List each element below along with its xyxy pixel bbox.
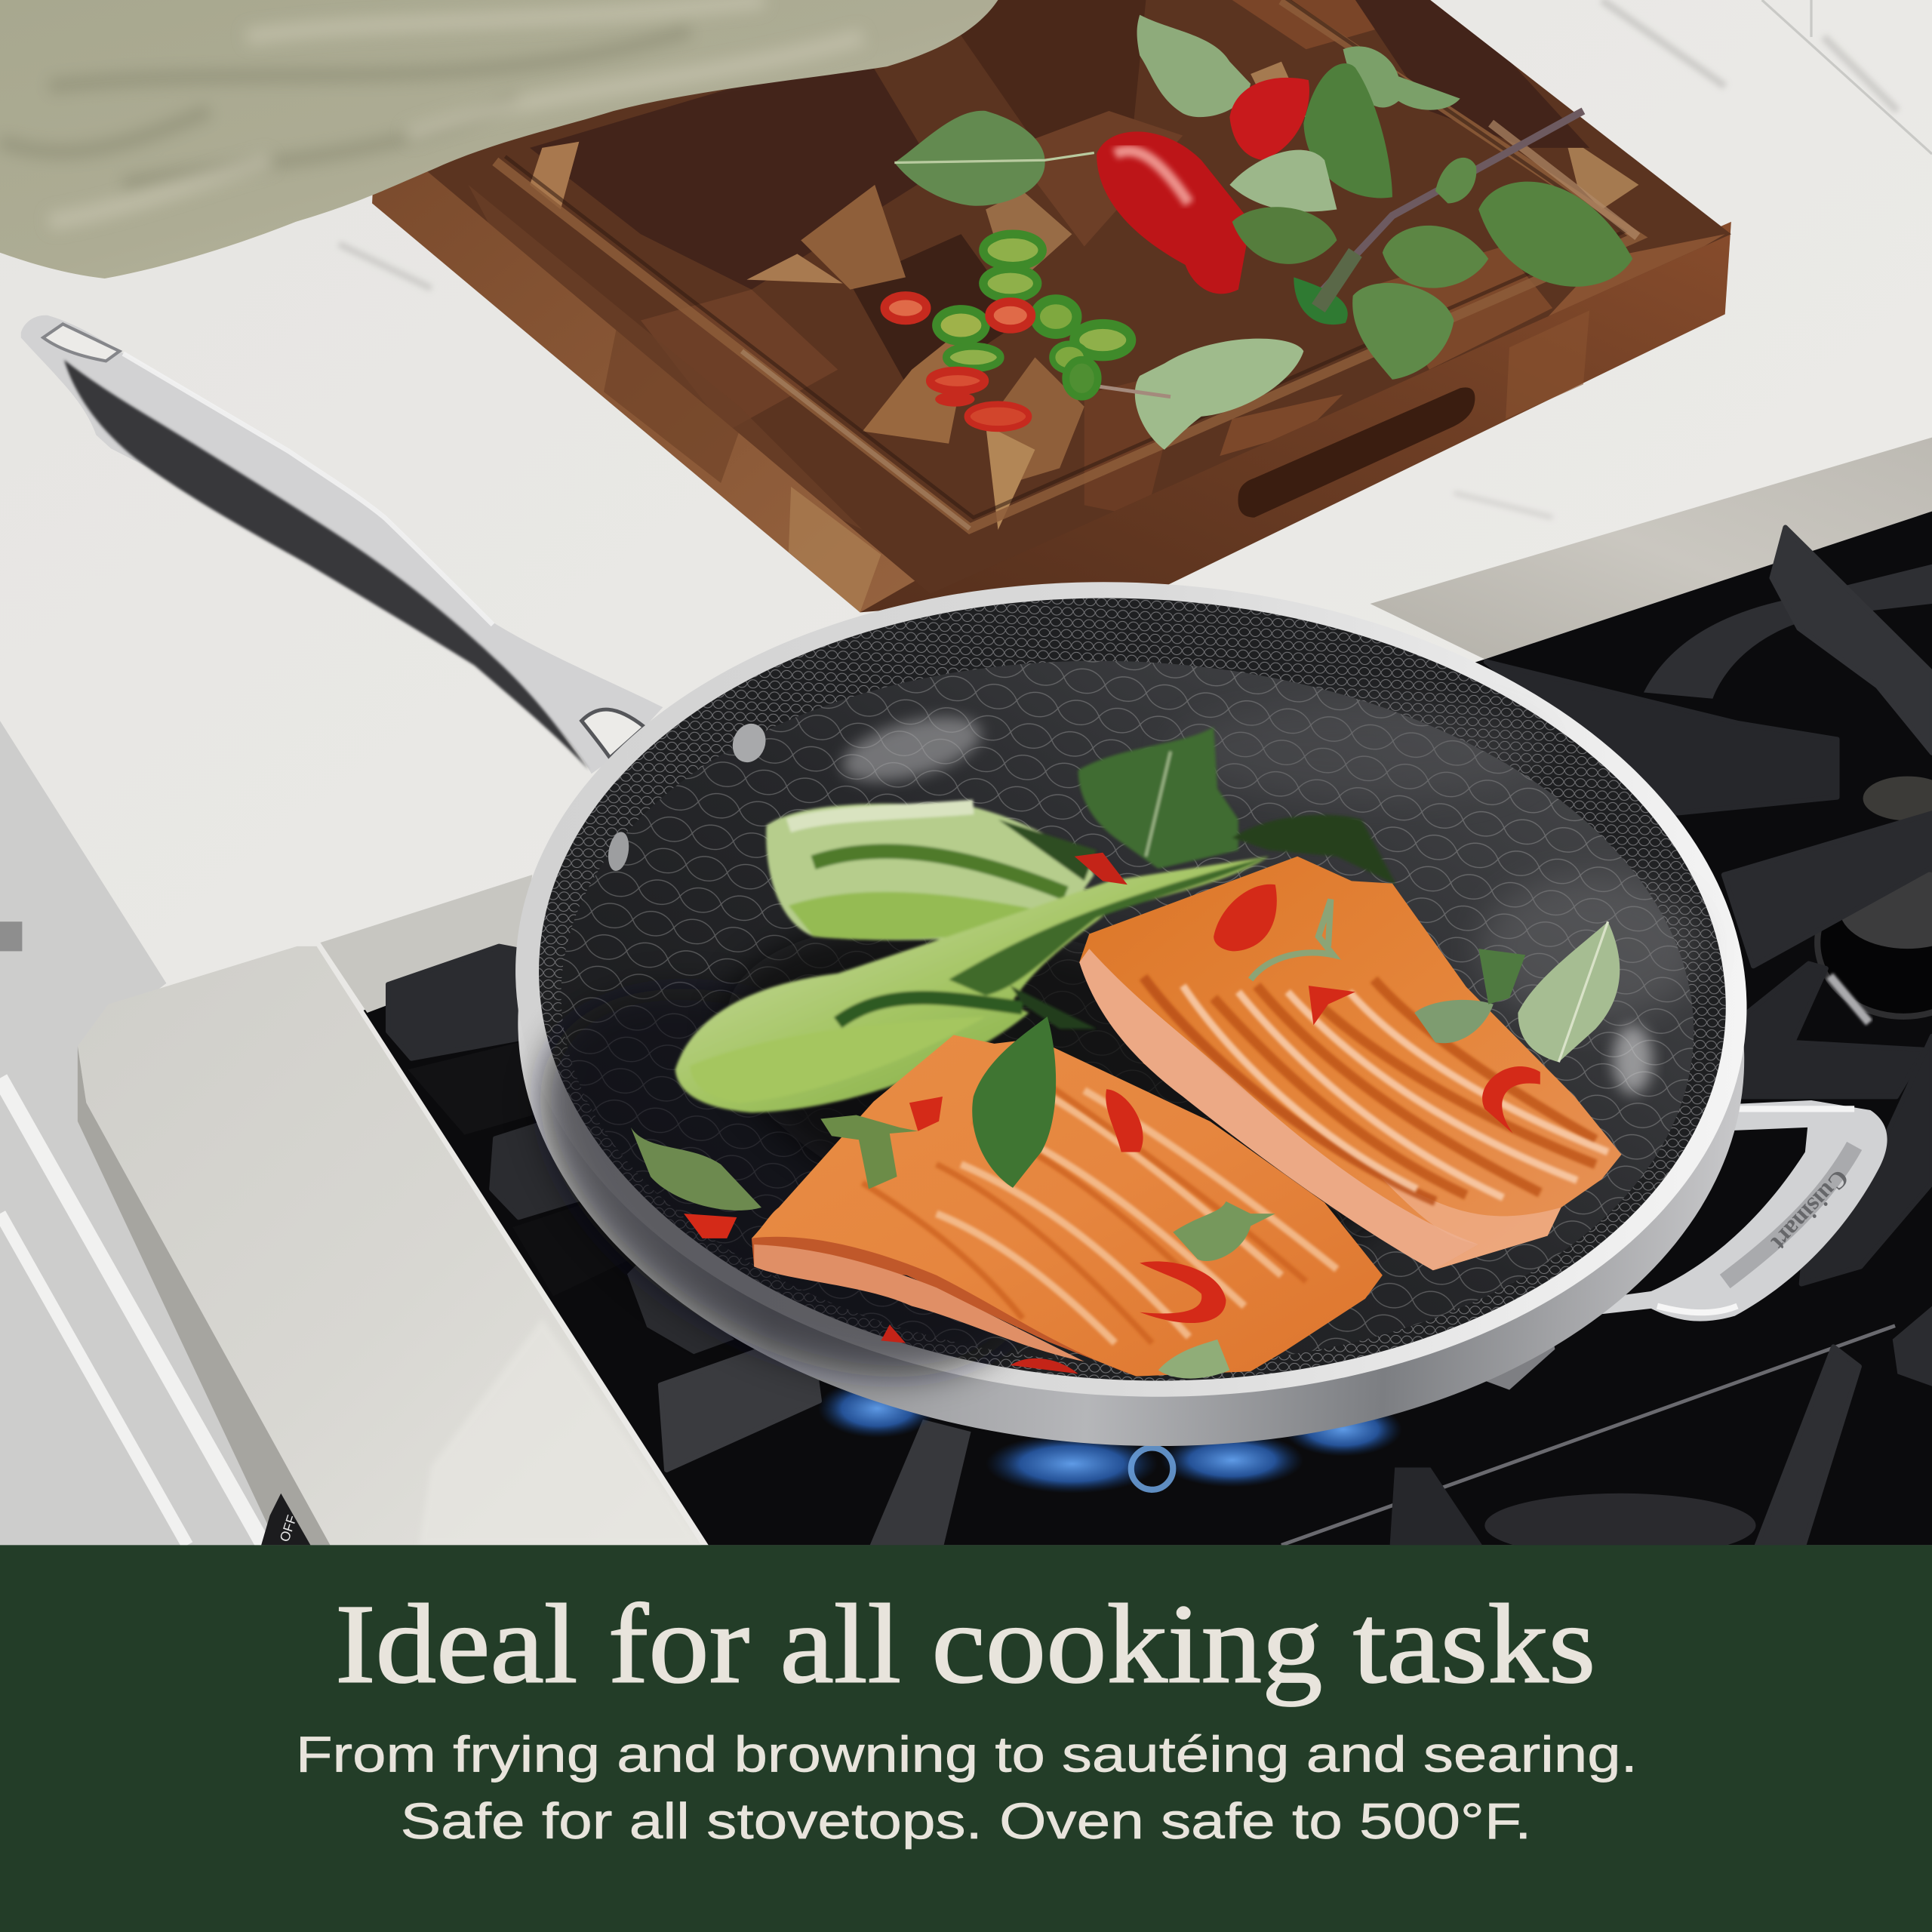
herb upper salmon: [1251, 900, 1334, 980]
rivets: [728, 719, 771, 767]
caption banner: [0, 1545, 1932, 1932]
basil sprig: [1229, 63, 1632, 380]
dark reflection: [64, 360, 589, 770]
sliced chilies: [884, 234, 1131, 429]
board top surface: [376, 0, 1731, 594]
chilies: [1214, 884, 1277, 951]
basil on lower salmon: [972, 1017, 1056, 1188]
juice groove: [495, 0, 1638, 528]
pan helper handle: [1476, 1100, 1887, 1390]
tile wall corner: [1762, 0, 1932, 154]
back bulb: [766, 804, 1094, 940]
cabinet front: [0, 721, 277, 1545]
highlights: [835, 704, 988, 794]
burner flames: [818, 1379, 1402, 1494]
hanging hole: [43, 324, 119, 361]
countertop: [0, 0, 1932, 1545]
knob dial: [261, 1494, 310, 1545]
salmon fillet lower: [752, 1035, 1383, 1377]
herb bottom: [1158, 1340, 1229, 1379]
knob label: OFF: [277, 1513, 300, 1543]
front bulb with stem: [675, 857, 1269, 1112]
board left side: [372, 128, 934, 612]
subtext line 1: From frying and browning to sautéing and searing.: [296, 1727, 1638, 1783]
herbs right: [1414, 1000, 1494, 1043]
rivet bracket: [1476, 1309, 1555, 1390]
pan cooking surface: [543, 632, 1712, 1393]
burner right: [1817, 777, 1932, 1023]
stove control panel: [78, 946, 701, 1545]
pan long handle: [21, 315, 663, 774]
cutting board: [372, 0, 1731, 612]
top highlight: [123, 354, 493, 625]
subtext line 2: Safe for all stovetops. Oven safe to 500°F.: [401, 1793, 1531, 1850]
board right side: [860, 222, 1731, 612]
basil leaf bottom: [1084, 339, 1303, 450]
left strip: [320, 875, 532, 1013]
herb left outside: [631, 1128, 761, 1211]
heading: Ideal for all cooking tasks: [335, 1582, 1595, 1707]
bok choy: [675, 727, 1396, 1112]
marble veining: [339, 0, 1897, 518]
lower-left shadow: [474, 909, 1103, 1457]
linen towel: [0, 0, 998, 278]
basil leaf left: [894, 111, 1094, 206]
pan body: [497, 605, 1765, 1477]
small herb lower salmon left: [820, 1115, 918, 1189]
bracket slot: [582, 709, 645, 758]
glossy reflection: [1484, 1494, 1756, 1558]
herb lower right: [1173, 1201, 1275, 1261]
end-grain blocks: [468, 0, 1725, 530]
dark leaf top: [1078, 727, 1238, 869]
salmon fillet upper: [1079, 857, 1622, 1270]
basil leaves top: [1137, 15, 1460, 117]
embossed brand: Cuisinart: [1766, 1164, 1854, 1256]
pan: [474, 551, 1767, 1477]
stovetop: [320, 512, 1932, 1558]
handle slot: [1238, 387, 1475, 518]
garnishes on food: [631, 853, 1620, 1379]
red pepper: [1097, 78, 1309, 294]
pan interior: [518, 568, 1746, 1411]
pan rim: [494, 551, 1767, 1428]
shadow under food: [687, 859, 1432, 1335]
herbs and chilies on board: [884, 15, 1632, 450]
stove grates: [388, 528, 1932, 1545]
stainless strip behind stove: [1371, 438, 1932, 659]
